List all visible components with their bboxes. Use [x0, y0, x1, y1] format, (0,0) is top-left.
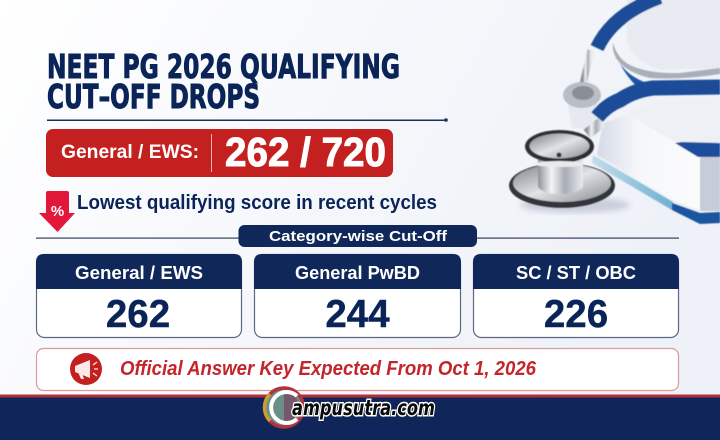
card: General / EWS: 262 [106, 293, 170, 336]
title: CUT–OFF DROPS [47, 77, 260, 116]
subtitle: Lowest qualifying score in recent cycles [77, 192, 437, 214]
footer band [0, 394, 720, 440]
card: General PwBD: General PwBD [295, 262, 420, 283]
section label [238, 225, 477, 247]
card: General PwBD: 244 [325, 293, 390, 336]
card: SC / ST / OBC: 226 [544, 293, 608, 336]
logo: campusutra.com: ampusutra.com [292, 396, 435, 420]
banner score: 262 / 720 [225, 129, 386, 175]
card: General / EWS: General / EWS [75, 262, 203, 283]
card: SC / ST / OBC [473, 254, 679, 338]
logo: campusutra.com [264, 388, 435, 427]
score banner [46, 129, 393, 177]
title rule [47, 118, 448, 122]
card: SC / ST / OBC: SC / ST / OBC [516, 262, 636, 283]
icon: down arrow percent: % [51, 203, 64, 220]
icon: megaphone [70, 353, 102, 385]
notice text: Official Answer Key Expected From Oct 1, 2026 [120, 358, 537, 380]
card: General / EWS [36, 254, 242, 338]
title [47, 47, 400, 116]
notice bar [36, 348, 678, 390]
section label: Category-wise Cut-Off [269, 228, 448, 245]
card: General PwBD [254, 254, 461, 338]
banner label: General / EWS: [61, 142, 199, 163]
icon: down arrow percent [39, 191, 75, 232]
title: NEET PG 2026 QUALIFYING [47, 47, 400, 86]
illustration: stethoscope on book [509, 0, 720, 224]
